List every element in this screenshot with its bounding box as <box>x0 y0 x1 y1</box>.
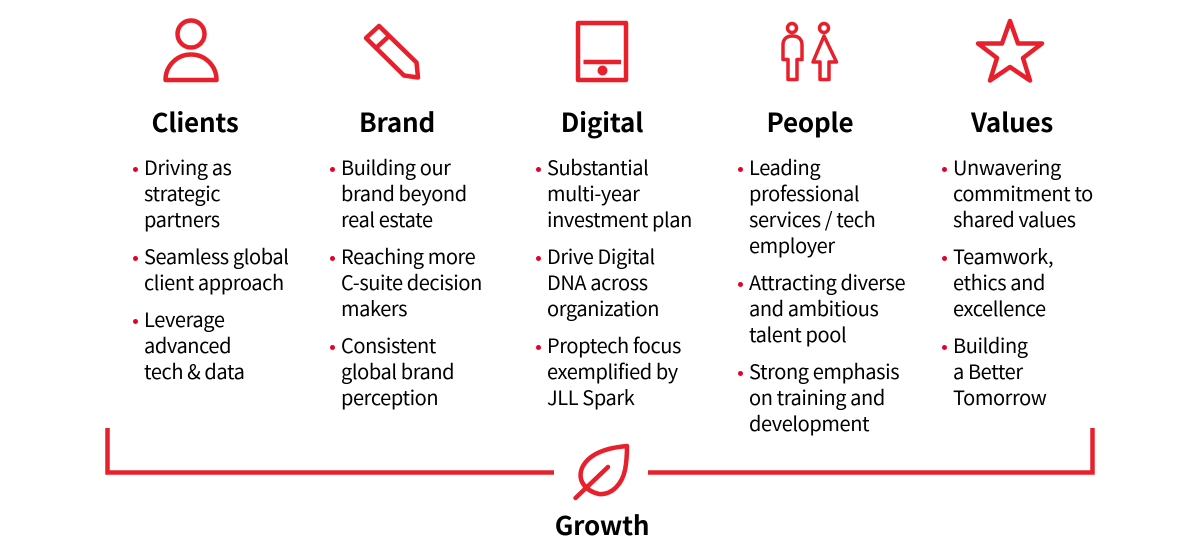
growth bracket: right <box>648 428 1092 472</box>
icon: person <box>166 20 216 80</box>
list: Brand <box>330 152 482 411</box>
bullet: Seamless global client approach <box>144 241 288 296</box>
icon: leaf <box>576 446 627 498</box>
bullet: Consistent global brand perception <box>341 330 454 411</box>
bullet: Leverage advanced tech & data <box>144 304 244 385</box>
icon: man and woman <box>783 24 836 80</box>
icon: tablet <box>578 23 626 80</box>
heading: Digital: Digital <box>561 103 643 140</box>
bullet: Drive Digital DNA across organization <box>547 241 659 322</box>
bullet: Attracting diverse and ambitious talent pool <box>749 267 905 348</box>
icon: pencil <box>366 26 418 78</box>
bullet: Reaching more C-suite decision makers <box>341 241 482 322</box>
list: People <box>738 152 905 437</box>
growth bracket: left <box>108 428 554 472</box>
list: Clients <box>133 152 288 385</box>
bullet: Building a Better Tomorrow <box>953 330 1046 411</box>
heading: Growth: Growth <box>555 506 649 543</box>
heading: Brand: Brand <box>359 103 435 140</box>
list: Digital <box>536 152 692 411</box>
icon: star <box>978 21 1042 80</box>
heading: Clients: Clients <box>151 103 239 140</box>
bullet: Unwavering commitment to shared values <box>953 152 1093 233</box>
heading: People: People <box>767 103 853 140</box>
bullet: Leading professional services / tech employer <box>749 152 875 259</box>
bullet: Building our brand beyond real estate <box>341 152 467 233</box>
bullet: Teamwork, ethics and excellence <box>953 241 1053 322</box>
bullet: Strong emphasis on training and development <box>749 356 899 437</box>
bullet: Proptech focus exemplified by JLL Spark <box>547 330 681 411</box>
list: Values <box>942 152 1093 411</box>
heading: Values: Values <box>971 103 1053 140</box>
bullet: Driving as strategic partners <box>144 152 232 233</box>
bullet: Substantial multi-year investment plan <box>547 152 692 233</box>
